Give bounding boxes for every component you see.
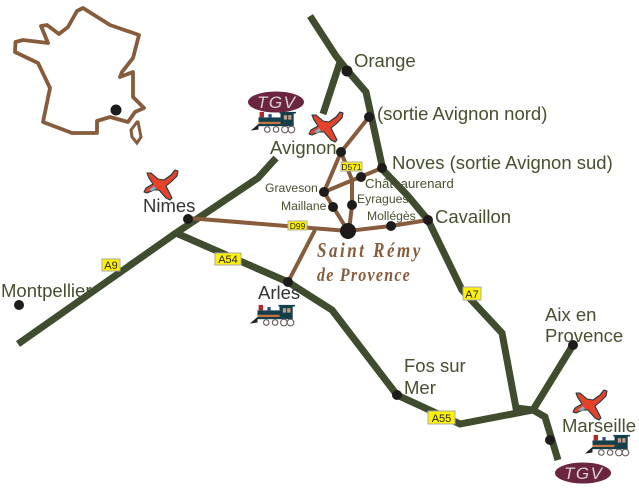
small village labels: Châteaurenard [365,176,454,191]
place labels: Marseille [562,415,636,436]
place labels: Arles [258,282,300,303]
location dot [110,104,122,116]
place labels: Cavaillon [435,206,511,227]
place labels: Montpellier [1,280,92,301]
road signs: D571 [341,162,362,172]
towns [14,66,578,445]
place labels: Provence [545,325,623,346]
place labels: Fos sur [404,355,466,376]
place labels: Mer [404,377,436,398]
icon: planes [144,112,607,420]
small village labels [265,176,454,223]
Corsica [131,122,141,143]
small village labels: Maillane [281,199,327,213]
title: Saint Rémy de Provence: Saint Rémy [317,239,422,263]
place labels: Noves (sortie Avignon sud) [392,152,613,173]
road signs: A7 [465,289,479,301]
place labels: (sortie Avignon nord) [377,103,547,124]
icon: TGV logos: TGV [564,464,604,483]
place labels [1,50,636,436]
road signs: A55 [432,413,451,425]
small village labels: Graveson [265,181,318,195]
place labels: Nimes [143,195,195,216]
road signs: A9 [104,260,118,272]
small village labels: Mollégès [367,209,416,223]
place labels: Aix en [545,304,596,325]
icon: TGV logos [248,92,611,484]
local roads [188,117,428,282]
title: Saint Rémy de Provence: de Provence [317,264,411,285]
motorways [18,16,573,460]
icon: TGV logos: TGV [257,93,297,112]
road signs: A54 [218,254,238,266]
icon: trains [250,112,630,456]
road signs [102,162,481,425]
title: Saint Rémy de Provence [317,239,422,285]
outline map of France [15,8,144,143]
road signs: D99 [290,221,306,231]
small village labels: Eyragues [357,192,408,206]
place labels: Avignon [270,137,337,158]
place labels: Orange [354,50,416,71]
